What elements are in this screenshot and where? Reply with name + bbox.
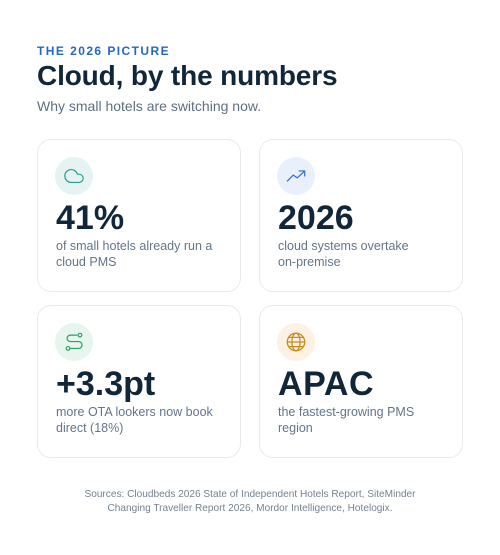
panel: 41% stat card	[37, 139, 241, 292]
sources footnote	[84, 488, 416, 514]
panel: 2026 stat card	[259, 139, 463, 292]
description: 41%: of small hotels already run a cloud PMS	[56, 239, 212, 269]
stat: 2026: 2026	[278, 199, 354, 237]
title: Cloud, by the numbers	[37, 60, 337, 91]
panel: APAC stat card	[259, 305, 463, 458]
subtitle: Why small hotels are switching now.	[37, 98, 261, 114]
icon: globe	[277, 323, 315, 361]
panel: +3.3pt stat card	[37, 305, 241, 458]
icon: trending up arrow	[277, 157, 315, 195]
icon: route	[55, 323, 93, 361]
sources footnote: Sources: Cloudbeds 2026 State of Independent Hotels Report, SiteMinder	[84, 488, 416, 500]
icon: cloud	[55, 157, 93, 195]
stat: APAC: APAC	[278, 365, 374, 403]
description: 2026	[278, 239, 409, 269]
stat: +3.3pt: +3.3pt	[56, 365, 155, 403]
description: 2026: cloud systems overtake	[278, 239, 409, 253]
sources footnote: Changing Traveller Report 2026, Mordor Intelligence, Hotelogix.	[107, 502, 393, 514]
description: 2026: on-premise	[278, 255, 341, 269]
description: +3.3pt: more OTA lookers now book direct (18%)	[56, 405, 213, 435]
eyebrow heading: THE 2026 PICTURE	[37, 44, 170, 58]
stat: 41%: 41%	[56, 199, 124, 237]
description: APAC: the fastest-growing PMS region	[278, 405, 414, 435]
